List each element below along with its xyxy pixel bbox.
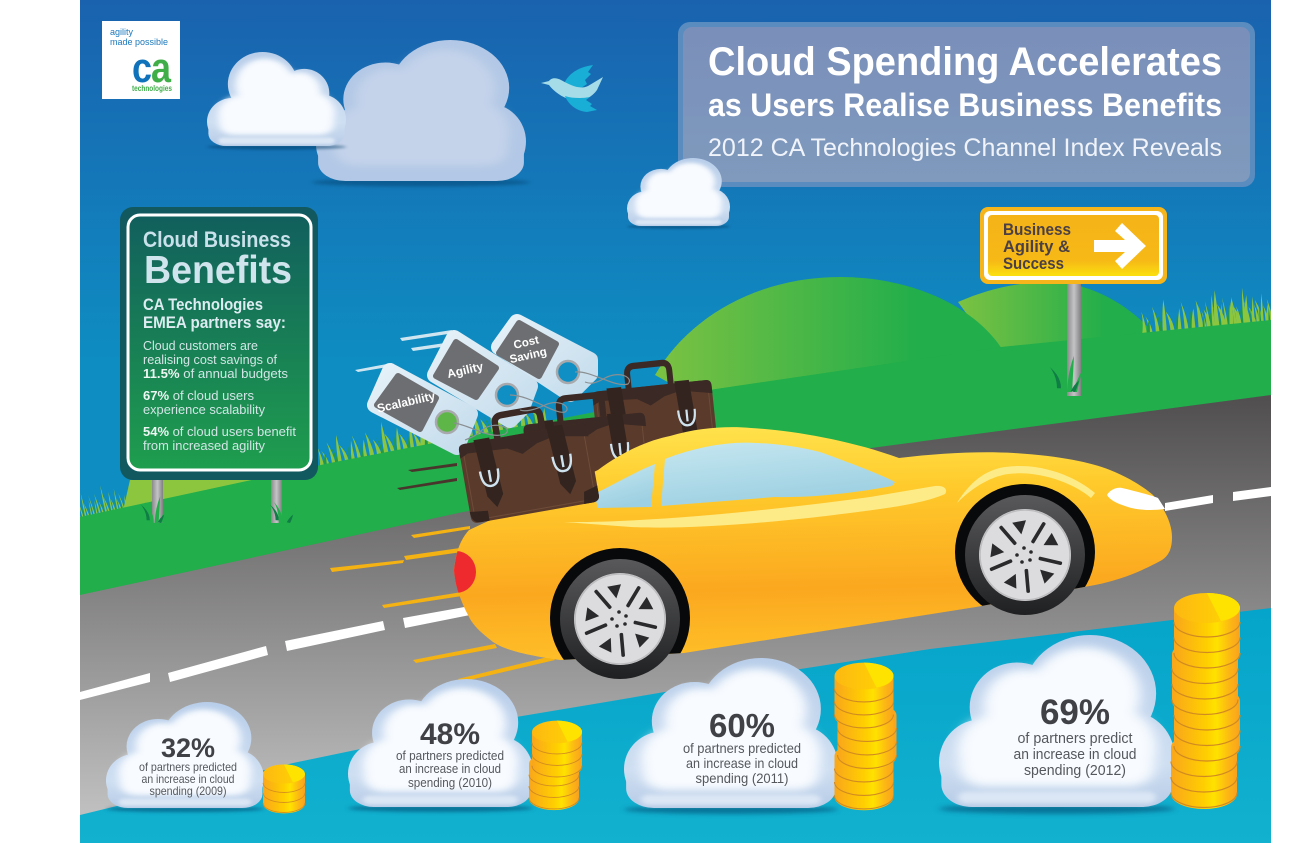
car side window — [594, 464, 655, 508]
caption: an increase in cloud — [142, 772, 234, 786]
road — [80, 395, 1271, 830]
stat: 2011 — [624, 658, 897, 814]
sign body text: from increased agility — [143, 438, 265, 453]
coins — [1171, 593, 1240, 809]
sign text — [1003, 221, 1071, 273]
ground — [80, 320, 1271, 620]
front wheel — [965, 495, 1085, 615]
car body highlight — [564, 486, 946, 528]
percentage: 60% — [709, 707, 775, 744]
tag: agility — [435, 338, 530, 420]
sign text: Agility & — [1003, 238, 1070, 256]
caption: of partners predict — [1018, 730, 1133, 747]
sign body text: 11.5% of annual budgets — [143, 366, 288, 381]
grass: left horizon — [80, 486, 126, 517]
tag: scalability — [375, 371, 470, 447]
cloud: white top left — [207, 52, 346, 150]
sign heading: Cloud Business — [143, 227, 291, 252]
grass: right horizon — [1142, 288, 1271, 333]
tag: cost saving: Cost — [513, 334, 540, 352]
icon: arrow — [1094, 223, 1146, 269]
rear wheel — [560, 559, 680, 679]
caption — [396, 748, 504, 790]
sign subheading: EMEA partners say: — [143, 313, 286, 332]
title line 3: 2012 CA Technologies Channel Index Reveals — [708, 134, 1222, 162]
icon: grass at left post — [141, 496, 167, 523]
cloud — [106, 702, 264, 812]
sign body text: 54% of cloud users benefit — [143, 424, 296, 439]
caption: of partners predicted — [683, 740, 801, 756]
tag: cost saving — [499, 322, 590, 394]
logo: CA Technologies: agility — [110, 27, 133, 38]
stat: 2012 — [939, 593, 1240, 814]
caption — [139, 760, 237, 798]
road sign: business agility and success — [980, 207, 1167, 396]
suitcase: front — [454, 401, 600, 524]
car fender highlight — [957, 466, 1095, 503]
title line 2: as Users Realise Business Benefits — [708, 87, 1222, 123]
title panel — [678, 22, 1255, 187]
icon: grass at right post — [270, 496, 296, 523]
caption: spending (2010) — [408, 775, 492, 790]
title line 1: Cloud Spending Accelerates — [708, 40, 1222, 84]
car headlight — [1107, 488, 1165, 510]
cloud: large pale — [312, 40, 530, 187]
sign body text: experience scalability — [143, 402, 265, 417]
icon: bird — [541, 65, 603, 112]
logo: CA Technologies: technologies — [132, 84, 172, 93]
speed lines: suitcases — [397, 463, 457, 490]
tag: scalability: Scalability — [376, 389, 437, 416]
hill: right rear — [958, 282, 1155, 360]
logo: CA Technologies — [102, 21, 180, 99]
sign body text — [143, 338, 296, 453]
cloud — [939, 635, 1175, 814]
stat: 2009 — [106, 702, 305, 813]
caption: an increase in cloud — [399, 761, 501, 776]
hill: left rear — [122, 478, 330, 515]
car speed lines — [330, 526, 555, 682]
sign text: Success — [1003, 255, 1064, 273]
road centre dashes — [80, 487, 1271, 700]
sign text: Business — [1003, 221, 1071, 239]
percentage: 32% — [161, 733, 215, 763]
percentage: 48% — [420, 718, 480, 751]
sign subheading: CA Technologies — [143, 295, 263, 314]
suitcase: middle — [521, 390, 653, 505]
icon: grass at sign post — [1050, 356, 1083, 392]
coins — [834, 663, 897, 810]
caption: spending (2011) — [696, 770, 788, 786]
caption: an increase in cloud — [686, 755, 798, 771]
caption: spending (2009) — [150, 784, 226, 798]
car body — [454, 427, 1172, 660]
wheel arch black — [550, 484, 1095, 660]
speed lines: tags — [355, 330, 452, 372]
suitcase: back — [590, 358, 719, 470]
cloud — [348, 679, 533, 812]
grass: middle horizon — [313, 394, 547, 468]
cloud — [624, 658, 838, 814]
caption: spending (2012) — [1024, 762, 1126, 779]
caption — [1014, 730, 1136, 779]
tag: agility: Agility — [446, 359, 485, 381]
tag strings — [454, 372, 629, 440]
percentage: 69% — [1040, 693, 1110, 732]
hill: large centre — [655, 277, 1004, 400]
caption: of partners predicted — [396, 748, 504, 763]
sign big word: Benefits — [144, 249, 292, 292]
logo: CA Technologies: made possible — [110, 37, 168, 48]
caption: an increase in cloud — [1014, 746, 1136, 763]
tag: cost saving: Saving — [509, 346, 548, 366]
sign subheading — [143, 295, 286, 332]
sign body text: 67% of cloud users — [143, 388, 254, 403]
sign body text: realising cost savings of — [143, 352, 277, 367]
green sign: cloud business benefits — [120, 207, 318, 523]
water band — [80, 608, 1271, 843]
cloud: small — [627, 158, 730, 229]
coins — [263, 764, 305, 813]
sign body text: Cloud customers are — [143, 338, 258, 353]
car — [436, 427, 1172, 688]
car tail light — [454, 551, 476, 593]
stat: 2010 — [348, 679, 582, 812]
caption: of partners predicted — [139, 760, 237, 774]
car windscreen — [661, 443, 895, 506]
logo: CA Technologies: c — [132, 44, 152, 91]
coins — [529, 721, 582, 810]
caption — [683, 740, 801, 786]
logo: CA Technologies: a — [151, 44, 172, 91]
